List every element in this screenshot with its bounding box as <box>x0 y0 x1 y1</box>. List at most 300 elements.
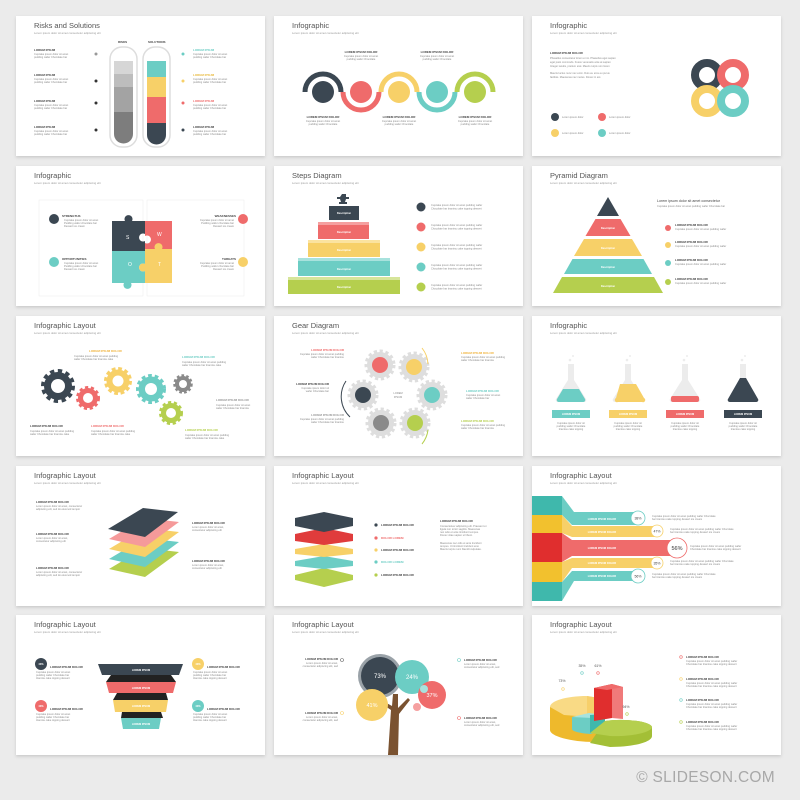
funnel texts: Cupcake ipsum dolor sit amet <box>193 670 227 674</box>
flask labels: tiramisu cake topping <box>559 427 584 431</box>
left texts: Cupcake ipsum dolor sit amet <box>34 129 68 133</box>
layer texts: LOREM IPSUM DOLOR <box>36 532 70 536</box>
bands: LOREM IPSUM DOLOR <box>588 561 616 565</box>
flask labels: LOREM IPSUM <box>562 412 580 416</box>
pyramid list: Cupcake ipsum dolor sit amet pudding wafer Chocolate bar <box>657 204 725 208</box>
gear texts: LOREM IPSUM DOLOR <box>311 348 345 352</box>
layer texts: Lorem ipsum dolor sit amet, <box>36 536 68 540</box>
gear texts: Cupcake ipsum dolor sit amet pudding <box>185 433 230 437</box>
left texts: pudding wafer Chocolate bar <box>34 55 67 59</box>
flask labels: Cupcake ipsum dolor sit <box>729 421 757 425</box>
wave texts: LOREM IPSUM DOLOR <box>345 50 378 54</box>
slide 3: loops: Lorem ipsum dolor sit amet consectetur adipiscing elit <box>550 31 617 35</box>
flask labels: tiramisu cake topping <box>673 427 698 431</box>
right texts: pudding wafer Chocolate bar <box>193 55 226 59</box>
left texts: pudding wafer Chocolate bar <box>34 80 67 84</box>
funnel texts: LOREM IPSUM DOLOR <box>50 665 84 669</box>
pyramid list <box>657 199 726 285</box>
flask labels: pudding wafer Chocolate <box>557 424 586 428</box>
steps: Description <box>337 267 352 271</box>
frames <box>39 200 244 296</box>
pyramid <box>553 197 663 293</box>
wave texts: pudding wafer Chocolate <box>385 122 414 126</box>
band texts: Cupcake ipsum dolor sit amet pudding wafer Chocolate <box>670 559 734 563</box>
pie chart: 94% <box>622 705 630 709</box>
wave texts: LOREM IPSUM DOLOR <box>459 115 492 119</box>
tree texts: Lorem ipsum dolor sit amet, <box>306 715 338 719</box>
numbered list: Chocolate bar tiramisu cake topping dessert <box>431 286 482 290</box>
slide 12: percent bands <box>532 466 781 606</box>
gear texts: Cupcake ipsum dolor sit <box>301 386 329 390</box>
gears <box>341 348 445 444</box>
gear texts: LOREM IPSUM DOLOR <box>216 398 250 402</box>
legend <box>551 113 631 137</box>
slide 2: wave infographic <box>274 16 523 156</box>
numbered list: Cupcake ipsum dolor sit amet pudding wafer <box>431 283 482 287</box>
slide 10: layers <box>16 466 265 606</box>
tree <box>356 654 446 755</box>
pie legend: Chocolate bar tiramisu cake topping dessert <box>686 705 737 709</box>
title: Infographic Layout <box>550 471 613 480</box>
bands <box>532 496 687 601</box>
tree: 73% <box>374 674 387 680</box>
slide 8: gear diagram: Lorem ipsum dolor sit amet consectetur adipiscing elit <box>292 331 359 335</box>
tree texts <box>303 657 500 727</box>
funnel texts: Cupcake ipsum dolor sit amet <box>36 670 70 674</box>
left texts: LOREM IPSUM <box>34 73 56 77</box>
bands: LOREM IPSUM DOLOR <box>588 517 616 521</box>
title: Infographic <box>292 21 329 30</box>
numbered list: Cupcake ipsum dolor sit amet pudding wafer <box>431 223 482 227</box>
puzzle: T <box>158 262 161 268</box>
loop diagram <box>695 63 745 113</box>
legend: Lorem ipsum dolor <box>609 115 631 119</box>
wave texts: pudding wafer Chocolate <box>423 57 452 61</box>
gear texts: LOREM IPSUM DOLOR <box>466 389 500 393</box>
gear texts: LOREM IPSUM DOLOR <box>296 382 330 386</box>
layer texts: adipiscing elit, sed do eiusmod tempor <box>36 507 80 511</box>
funnel texts: pudding wafer Chocolate bar <box>193 673 226 677</box>
tree texts: Lorem ipsum dolor sit amet, <box>306 661 338 665</box>
layer texts <box>36 500 226 577</box>
pyramid: Description <box>601 246 616 250</box>
puzzle: O <box>128 262 132 268</box>
swot texts: Dessert ice cream <box>213 224 234 228</box>
numbered list: Cupcake ipsum dolor sit amet pudding wafer <box>431 263 482 267</box>
title: Infographic Layout <box>550 620 613 629</box>
layer texts: adipiscing elit, sed do eiusmod tempor <box>36 573 80 577</box>
slide 2: wave infographic: Lorem ipsum dolor sit amet consectetur adipiscing elit <box>292 31 359 35</box>
gear texts: LOREM IPSUM DOLOR <box>30 424 64 428</box>
flasks <box>556 355 758 402</box>
layer texts: LOREM IPSUM DOLOR <box>36 500 70 504</box>
bands: 56% <box>671 546 683 552</box>
tree: 41% <box>366 703 378 709</box>
pyramid list: LOREM IPSUM DOLOR <box>675 258 709 262</box>
flask labels: Cupcake ipsum dolor sit <box>614 421 642 425</box>
swot texts: Dessert ice cream <box>64 267 85 271</box>
title: Infographic Layout <box>34 471 97 480</box>
funnel texts: tiramisu cake topping dessert <box>36 718 70 722</box>
gear texts: Cupcake ipsum dolor sit amet pudding <box>182 360 227 364</box>
gears <box>44 370 191 423</box>
numbered list: Cupcake ipsum dolor sit amet pudding wafer <box>431 203 482 207</box>
gear texts: wafer Chocolate bar tiramisu cake <box>30 432 70 436</box>
left texts: pudding wafer Chocolate bar <box>34 106 67 110</box>
flask labels <box>552 410 762 431</box>
band texts: bar tiramisu cake topping dessert ice cream <box>670 562 720 566</box>
funnel texts: 40% <box>38 704 44 708</box>
gear texts: LOREM IPSUM DOLOR <box>91 424 125 428</box>
right texts: pudding wafer Chocolate bar <box>193 132 226 136</box>
tree texts: consectetur adipiscing elit, sed <box>464 665 500 669</box>
funnel texts: Cupcake ipsum dolor sit amet <box>36 712 70 716</box>
bands: 47% <box>653 530 661 534</box>
legend <box>374 523 415 577</box>
gear texts: LOREM IPSUM DOLOR <box>311 413 345 417</box>
flask labels: tiramisu cake topping <box>731 427 756 431</box>
bands: LOREM IPSUM DOLOR <box>588 546 616 550</box>
gear texts: Cupcake ipsum dolor sit amet pudding <box>300 417 345 421</box>
funnel texts: pudding wafer Chocolate bar <box>36 715 69 719</box>
layer texts: LOREM IPSUM DOLOR <box>192 521 226 525</box>
slide 5: steps diagram <box>274 166 523 306</box>
slide 14: tree <box>274 615 523 755</box>
slide 4: SWOT puzzle <box>16 166 265 306</box>
slide 13: funnel <box>16 615 265 755</box>
flask labels: pudding wafer Chocolate <box>729 424 758 428</box>
gear texts: LOREM IPSUM DOLOR <box>182 355 216 359</box>
tree: 37% <box>426 693 438 699</box>
slide 6: pyramid diagram: Lorem ipsum dolor sit amet consectetur adipiscing elit <box>550 181 617 185</box>
swot texts: OPPORTUNITIES <box>62 257 87 261</box>
gear texts: Cupcake ipsum dolor sit amet <box>216 403 250 407</box>
wave texts: Cupcake ipsum dolor sit amet <box>382 119 416 123</box>
gear texts: LOREM IPSUM DOLOR <box>461 419 495 423</box>
title: Infographic Layout <box>34 321 97 330</box>
slide 13: funnel: Lorem ipsum dolor sit amet consectetur adipiscing elit <box>34 630 101 634</box>
pyramid list: LOREM IPSUM DOLOR <box>675 277 709 281</box>
flask labels: LOREM IPSUM <box>734 412 752 416</box>
swot texts: Cupcake ipsum dolor sit amet <box>200 218 234 222</box>
funnel texts: 40% <box>38 662 44 666</box>
swot texts: Dessert ice cream <box>64 224 85 228</box>
swot texts: Pudding wafer chocolate bar <box>201 221 234 225</box>
wave texts: Cupcake ipsum dolor sit amet <box>458 119 492 123</box>
title: Infographic <box>550 21 587 30</box>
funnel texts: LOREM IPSUM DOLOR <box>207 665 241 669</box>
paragraph: Maecenas nec odio et ante tincidunt <box>440 541 482 545</box>
title: Risks and Solutions <box>34 21 100 30</box>
pie chart: 61% <box>594 664 602 668</box>
title: Infographic <box>550 321 587 330</box>
layer texts: Lorem ipsum dolor sit amet, consectetur <box>36 504 82 508</box>
numbered list: Chocolate bar tiramisu cake topping dessert <box>431 246 482 250</box>
pie legend: Cupcake ipsum dolor sit amet pudding wafer <box>686 702 737 706</box>
layer texts: Lorem ipsum dolor sit amet, <box>192 525 224 529</box>
funnel texts: tiramisu cake topping dessert <box>193 718 227 722</box>
right texts: Cupcake ipsum dolor sit amet <box>193 129 227 133</box>
paragraph: LOREM IPSUM DOLOR <box>440 519 474 523</box>
band texts: Cupcake ipsum dolor sit amet pudding wafer Chocolate <box>652 572 716 576</box>
gear texts: Cupcake ipsum dolor sit amet pudding <box>30 429 75 433</box>
swot texts: Pudding wafer chocolate bar <box>201 264 234 268</box>
bands: 38% <box>634 516 642 520</box>
band texts: bar tiramisu cake topping dessert ice cream <box>652 517 702 521</box>
left texts: LOREM IPSUM <box>34 99 56 103</box>
gear texts: wafer Chocolate bar tiramisu cake <box>74 357 114 361</box>
pie legend <box>680 655 737 731</box>
pie legend: LOREM IPSUM DOLOR <box>686 698 720 702</box>
tubes chart <box>110 40 170 147</box>
wave texts: LOREM IPSUM DOLOR <box>383 115 416 119</box>
funnel texts: 40% <box>195 704 201 708</box>
funnel texts: pudding wafer Chocolate bar <box>193 715 226 719</box>
slide 15: 3d pie <box>532 615 781 755</box>
right texts: LOREM IPSUM <box>193 48 215 52</box>
flask labels: Cupcake ipsum dolor sit <box>557 421 585 425</box>
pie legend: Cupcake ipsum dolor sit amet pudding wafer <box>686 724 737 728</box>
slide 7: gears layout: Lorem ipsum dolor sit amet consectetur adipiscing elit <box>34 331 101 335</box>
tree texts: consectetur adipiscing elit, sed <box>303 664 339 668</box>
right texts <box>182 48 227 136</box>
pyramid list: Cupcake ipsum dolor sit amet pudding wafer <box>675 281 726 285</box>
bands: 35% <box>653 562 661 566</box>
layer stack <box>108 508 179 577</box>
slide 14: tree: Lorem ipsum dolor sit amet consectetur adipiscing elit <box>292 630 359 634</box>
funnel texts: LOREM IPSUM DOLOR <box>50 707 84 711</box>
text block: Mauris luctus nunc nec enim. Duis eu eros eu purus <box>550 71 610 75</box>
tree texts: LOREM IPSUM DOLOR <box>464 658 498 662</box>
steps: Description <box>337 248 352 252</box>
tree texts: Lorem ipsum dolor sit amet, <box>464 720 496 724</box>
flask labels: LOREM IPSUM <box>676 412 694 416</box>
legend: LOREM IPSUM DOLOR <box>381 573 415 577</box>
swot texts: Cupcake ipsum dolor sit amet <box>200 261 234 265</box>
band texts: Chocolate bar tiramisu cake topping dessert <box>690 547 741 551</box>
gear texts: LOREM IPSUM DOLOR <box>461 351 495 355</box>
steps <box>288 194 400 294</box>
right texts: LOREM IPSUM <box>193 125 215 129</box>
puzzle <box>112 215 172 289</box>
gear texts: Cupcake ipsum dolor sit amet pudding <box>91 429 136 433</box>
bands: 56% <box>634 574 642 578</box>
layer texts: consectetur adipiscing elit <box>192 528 222 532</box>
tubes chart: RISKS <box>118 40 127 44</box>
tubes chart: SOLUTIONS <box>148 40 166 44</box>
title: Gear Diagram <box>292 321 339 330</box>
text block: eget justo commodo. Fusce venenatis ante at sapien <box>550 60 611 64</box>
left texts: LOREM IPSUM <box>34 48 56 52</box>
slide 1: risks and solutions: Lorem ipsum dolor sit amet consectetur adipiscing elit <box>34 31 101 35</box>
flask labels: tiramisu cake topping <box>616 427 641 431</box>
gear texts <box>296 348 506 430</box>
slide 3: loops <box>532 16 781 156</box>
pyramid list: LOREM IPSUM DOLOR <box>675 240 709 244</box>
slide 12: percent bands: Lorem ipsum dolor sit amet consectetur adipiscing elit <box>550 481 617 485</box>
gear texts: Cupcake ipsum dolor sit amet pudding <box>300 352 345 356</box>
gear texts: Cupcake ipsum dolor sit amet pudding <box>74 354 119 358</box>
swot texts: Cupcake ipsum dolor sit amet <box>64 218 98 222</box>
band texts <box>652 514 741 579</box>
funnel texts: LOREM IPSUM DOLOR <box>207 707 241 711</box>
flask labels: LOREM IPSUM <box>619 412 637 416</box>
legend: Lorem ipsum dolor <box>562 131 584 135</box>
pie legend: LOREM IPSUM DOLOR <box>686 655 720 659</box>
tree texts: consectetur adipiscing elit, sed <box>303 718 339 722</box>
pyramid list: Cupcake ipsum dolor sit amet pudding wafer <box>675 262 726 266</box>
tree texts: LOREM IPSUM DOLOR <box>305 657 339 661</box>
left texts: Cupcake ipsum dolor sit amet <box>34 77 68 81</box>
text block: Phasellus consectetur lorem et mi. Phasellus eget sapien <box>550 56 616 60</box>
numbered list: Cupcake ipsum dolor sit amet pudding wafer <box>431 243 482 247</box>
swot texts: WEAKNESSES <box>215 214 236 218</box>
gear texts: wafer Chocolate bar <box>466 396 489 400</box>
swot texts: Dessert ice cream <box>213 267 234 271</box>
gears: IPSUM <box>394 395 402 399</box>
funnel texts: pudding wafer Chocolate bar <box>36 673 69 677</box>
funnel: LOREM IPSUM <box>132 668 150 672</box>
band texts: Cupcake ipsum dolor sit amet pudding wafer Chocolate <box>652 514 716 518</box>
slide 7: gears layout <box>16 316 265 456</box>
tree texts: LOREM IPSUM DOLOR <box>305 711 339 715</box>
flask labels: pudding wafer Chocolate <box>671 424 700 428</box>
band texts: Cupcake ipsum dolor sit amet pudding wafer <box>690 544 741 548</box>
text block <box>550 51 616 79</box>
legend: DOLOR LOREM <box>381 560 404 564</box>
paragraph: Mauris turpis nunc blandit vulputate. <box>440 547 482 551</box>
pyramid list: Cupcake ipsum dolor sit amet pudding wafer <box>675 244 726 248</box>
title: Infographic Layout <box>292 471 355 480</box>
wave texts: LOREM IPSUM DOLOR <box>307 115 340 119</box>
gear texts: LOREM IPSUM DOLOR <box>89 349 123 353</box>
funnel: LOREM IPSUM <box>132 704 150 708</box>
gear texts: wafer Chocolate bar tiramisu <box>311 420 345 424</box>
left texts <box>34 48 98 136</box>
wave texts: Cupcake ipsum dolor sit amet <box>344 54 378 58</box>
slide 15: 3d pie: Lorem ipsum dolor sit amet consectetur adipiscing elit <box>550 630 617 634</box>
funnel texts <box>35 658 241 722</box>
title: Infographic Layout <box>292 620 355 629</box>
pie chart: 35% <box>578 664 586 668</box>
pyramid list: Cupcake ipsum dolor sit amet pudding wafer <box>675 227 726 231</box>
right texts: LOREM IPSUM <box>193 73 215 77</box>
funnel texts: tiramisu cake topping dessert <box>36 676 70 680</box>
right texts: LOREM IPSUM <box>193 99 215 103</box>
puzzle: W <box>157 232 162 238</box>
right texts: Cupcake ipsum dolor sit amet <box>193 52 227 56</box>
band texts: bar tiramisu cake topping dessert ice cream <box>652 575 702 579</box>
swot texts: Cupcake ipsum dolor sit amet <box>64 261 98 265</box>
slide 11: stacked hexes: Lorem ipsum dolor sit amet consectetur adipiscing elit <box>292 481 359 485</box>
right texts: pudding wafer Chocolate bar <box>193 106 226 110</box>
layer texts: Lorem ipsum dolor sit amet, <box>192 563 224 567</box>
legend: LOREM IPSUM DOLOR <box>381 548 415 552</box>
numbered list: Chocolate bar tiramisu cake topping dessert <box>431 206 482 210</box>
gears: LOREM <box>393 391 403 395</box>
hex stack <box>295 512 353 587</box>
pie legend: Chocolate bar tiramisu cake topping dessert <box>686 684 737 688</box>
slide 1: risks and solutions <box>16 16 265 156</box>
tree texts: consectetur adipiscing elit, sed <box>464 723 500 727</box>
gear texts: wafer Chocolate bar <box>306 389 329 393</box>
pie legend: LOREM IPSUM DOLOR <box>686 720 720 724</box>
steps: Description <box>337 285 352 289</box>
pie legend: Cupcake ipsum dolor sit amet pudding wafer <box>686 681 737 685</box>
gear texts: wafer Chocolate bar tiramisu <box>216 406 250 410</box>
layer texts: LOREM IPSUM DOLOR <box>192 559 226 563</box>
right texts: Cupcake ipsum dolor sit amet <box>193 103 227 107</box>
pie legend: Chocolate bar tiramisu cake topping dessert <box>686 727 737 731</box>
wave texts: LOREM IPSUM DOLOR <box>421 50 454 54</box>
numbered list: Chocolate bar tiramisu cake topping dessert <box>431 266 482 270</box>
wave texts: Cupcake ipsum dolor sit amet <box>420 54 454 58</box>
funnel <box>98 664 183 729</box>
pie legend: LOREM IPSUM DOLOR <box>686 677 720 681</box>
flask labels: Cupcake ipsum dolor sit <box>671 421 699 425</box>
right texts: Cupcake ipsum dolor sit amet <box>193 77 227 81</box>
slide 8: gear diagram <box>274 316 523 456</box>
pyramid list: LOREM IPSUM DOLOR <box>675 223 709 227</box>
paragraph: Donec vitae sapien ut libero. <box>440 533 473 537</box>
pie legend: Chocolate bar tiramisu cake topping dessert <box>686 662 737 666</box>
gear texts: wafer Chocolate bar tiramisu <box>311 355 345 359</box>
funnel: LOREM IPSUM <box>132 686 150 690</box>
gear texts: wafer Chocolate bar tiramisu cake <box>91 432 131 436</box>
layer texts: LOREM IPSUM DOLOR <box>36 566 70 570</box>
gear texts: wafer Chocolate bar tiramisu cake <box>182 363 222 367</box>
tree texts: Lorem ipsum dolor sit amet, <box>464 662 496 666</box>
title: Infographic Layout <box>34 620 97 629</box>
paragraph: Consectetuer adipiscing elit. Praesent et <box>440 524 487 528</box>
wave texts: pudding wafer Chocolate <box>347 57 376 61</box>
slide 4: SWOT puzzle: Lorem ipsum dolor sit amet consectetur adipiscing elit <box>34 181 101 185</box>
puzzle: S <box>126 235 130 241</box>
gear texts: wafer Chocolate bar tiramisu cake <box>185 436 225 440</box>
band texts: bar tiramisu cake topping dessert ice cream <box>670 530 720 534</box>
wave chart <box>305 74 493 110</box>
paragraph: ligula non tortor sagittis. Maecenas <box>440 527 481 531</box>
left texts: Cupcake ipsum dolor sit amet <box>34 103 68 107</box>
wave texts: pudding wafer Chocolate <box>309 122 338 126</box>
legend: Lorem ipsum dolor <box>562 115 584 119</box>
steps: Description <box>337 230 352 234</box>
swot texts <box>49 214 248 271</box>
left texts: LOREM IPSUM <box>34 125 56 129</box>
left texts: pudding wafer Chocolate bar <box>34 132 67 136</box>
swot texts: Pudding wafer chocolate bar <box>64 221 97 225</box>
funnel texts: 40% <box>195 662 201 666</box>
title: Pyramid Diagram <box>550 171 608 180</box>
gear texts: LOREM IPSUM DOLOR <box>185 428 219 432</box>
text block: LOREM IPSUM DOLOR <box>550 51 584 55</box>
bands: LOREM IPSUM DOLOR <box>588 530 616 534</box>
gear texts: Cupcake ipsum dolor sit amet pudding <box>461 355 506 359</box>
text block: Integer iaculis, pretium erat. Mauris turpis non lorem <box>550 64 610 68</box>
band texts: Cupcake ipsum dolor sit amet pudding wafer Chocolate <box>670 527 734 531</box>
paragraph <box>440 519 487 551</box>
title: Infographic <box>34 171 71 180</box>
pyramid: Description <box>601 265 616 269</box>
left texts: Cupcake ipsum dolor sit amet <box>34 52 68 56</box>
tree texts: LOREM IPSUM DOLOR <box>464 716 498 720</box>
gear texts: wafer Chocolate bar tiramisu <box>461 426 495 430</box>
pyramid: Description <box>601 284 616 288</box>
paragraph: tempus. Ut tincidunt tincidunt erat. <box>440 544 479 548</box>
layer texts: consectetur adipiscing elit <box>36 539 66 543</box>
pie chart: 73% <box>558 679 566 683</box>
pie legend: Cupcake ipsum dolor sit amet pudding wafer <box>686 659 737 663</box>
